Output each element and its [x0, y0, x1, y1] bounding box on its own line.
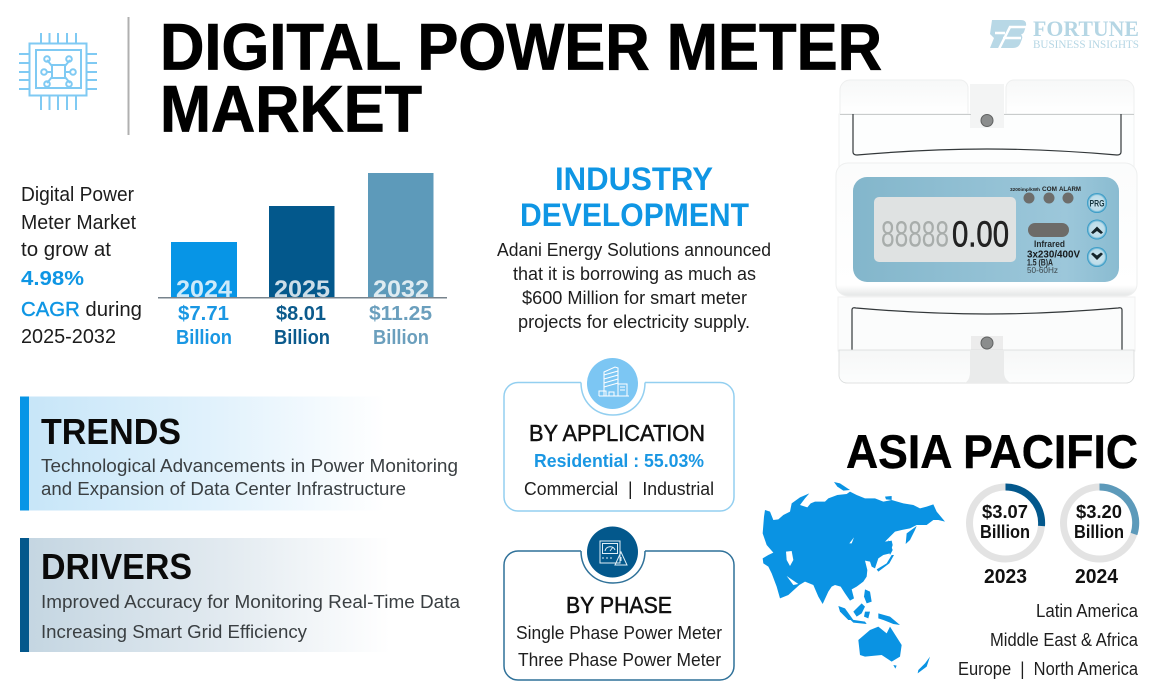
industry development: INDUSTRY [555, 161, 713, 197]
meter body [836, 163, 1137, 296]
meter top cover [839, 80, 1134, 170]
panel: drivers [20, 538, 461, 652]
panel: by application: Commercial | Industrial [524, 479, 714, 499]
title: DIGITAL POWER METER [160, 10, 882, 84]
bar chart: $7.71 [178, 303, 229, 325]
donut: 2023: 2023 [984, 566, 1027, 588]
bar chart: 2024 [176, 276, 233, 303]
industry development: projects for electricity supply. [518, 312, 750, 332]
indicators: 50-60Hz [1027, 265, 1058, 275]
industry development: Adani Energy Solutions announced [497, 240, 771, 260]
logo: Fortune Business Insights: BUSINESS INSIGHTS [1033, 39, 1139, 51]
LCD readout: 0.00 [952, 214, 1009, 254]
icon: buildings [587, 358, 638, 409]
buttons: PRG [1090, 198, 1104, 208]
growth text: Meter Market [21, 212, 136, 234]
donut: 2023: Billion [980, 522, 1030, 542]
panel: by phase: Single Phase Power Meter [516, 623, 722, 643]
panel: trends: TRENDS [41, 411, 181, 452]
growth text [21, 184, 142, 348]
title [160, 10, 882, 146]
logo: Fortune Business Insights [990, 16, 1139, 51]
title: MARKET [160, 72, 422, 146]
other regions list [958, 601, 1139, 679]
panel: by phase: Three Phase Power Meter [518, 650, 721, 670]
buttons [1087, 193, 1107, 267]
bar chart: 2025 [274, 276, 330, 303]
panel: trends [20, 396, 458, 510]
display panel [853, 177, 1119, 282]
meter lower cover [839, 308, 1134, 383]
indicators [1010, 186, 1081, 275]
bar chart [158, 173, 447, 349]
panel: drivers: DRIVERS [41, 546, 192, 587]
bar chart: Billion [274, 327, 330, 349]
other regions list: Middle East & Africa [990, 630, 1139, 650]
LCD readout: 88888 [881, 214, 949, 254]
indicators: Infrared [1034, 239, 1065, 249]
donut: 2023: $3.07 [982, 502, 1028, 522]
other regions list: Latin America [1036, 601, 1139, 621]
indicators: COM [1042, 186, 1057, 193]
donut: 2024: 2024 [1075, 566, 1119, 588]
bar chart: Billion [373, 327, 429, 349]
other regions list: Europe | North America [958, 659, 1139, 679]
panel: trends: Technological Advancements in Power Monitoring [41, 455, 458, 476]
illustration: digital power meter [836, 80, 1137, 383]
industry development: DEVELOPMENT [520, 197, 749, 233]
indicators: 1.5 (B)A [1027, 258, 1053, 268]
donut: 2024: $3.20 [1076, 502, 1122, 522]
bar chart: $8.01 [276, 303, 326, 325]
panel: drivers: Improved Accuracy for Monitoring Real-Time Data [41, 591, 461, 612]
panel: trends: and Expansion of Data Center Infrastructure [41, 478, 406, 499]
panel: by application [504, 358, 734, 511]
growth text: CAGR during [21, 299, 142, 321]
panel: by application: BY APPLICATION [529, 420, 705, 446]
indicators: ALARM [1059, 186, 1081, 193]
indicators: 3200imp/kWh [1010, 187, 1040, 192]
donut: 2024 [1064, 487, 1136, 588]
bar chart: 2032 [373, 276, 429, 303]
industry development: $600 Million for smart meter [522, 288, 747, 308]
logo: Fortune Business Insights: FORTUNE [1033, 16, 1139, 41]
title divider [128, 17, 130, 135]
growth text: 2025-2032 [21, 326, 116, 348]
region heading: Asia Pacific: ASIA PACIFIC [846, 425, 1138, 478]
LCD readout [874, 197, 1016, 262]
icon: microchip [19, 33, 97, 110]
panel: by application: Residential : 55.03% [534, 451, 704, 471]
bar chart: $11.25 [369, 303, 432, 325]
growth text: Digital Power [21, 184, 134, 206]
donut: 2024: Billion [1074, 522, 1124, 542]
industry development [497, 161, 771, 332]
icon: meter gauge [587, 526, 638, 578]
bar chart: Billion [176, 327, 232, 349]
indicators: 3x230/400V [1027, 248, 1080, 260]
growth text: to grow at [21, 239, 111, 261]
industry development: that it is borrowing as much as [513, 264, 756, 284]
growth text: 4.98% [21, 268, 84, 290]
map: Asia Pacific [763, 482, 945, 673]
donut: 2023 [970, 487, 1042, 588]
panel: by phase: BY PHASE [566, 592, 672, 618]
panel: drivers: Increasing Smart Grid Efficiency [41, 621, 308, 642]
panel: by phase [504, 526, 734, 680]
